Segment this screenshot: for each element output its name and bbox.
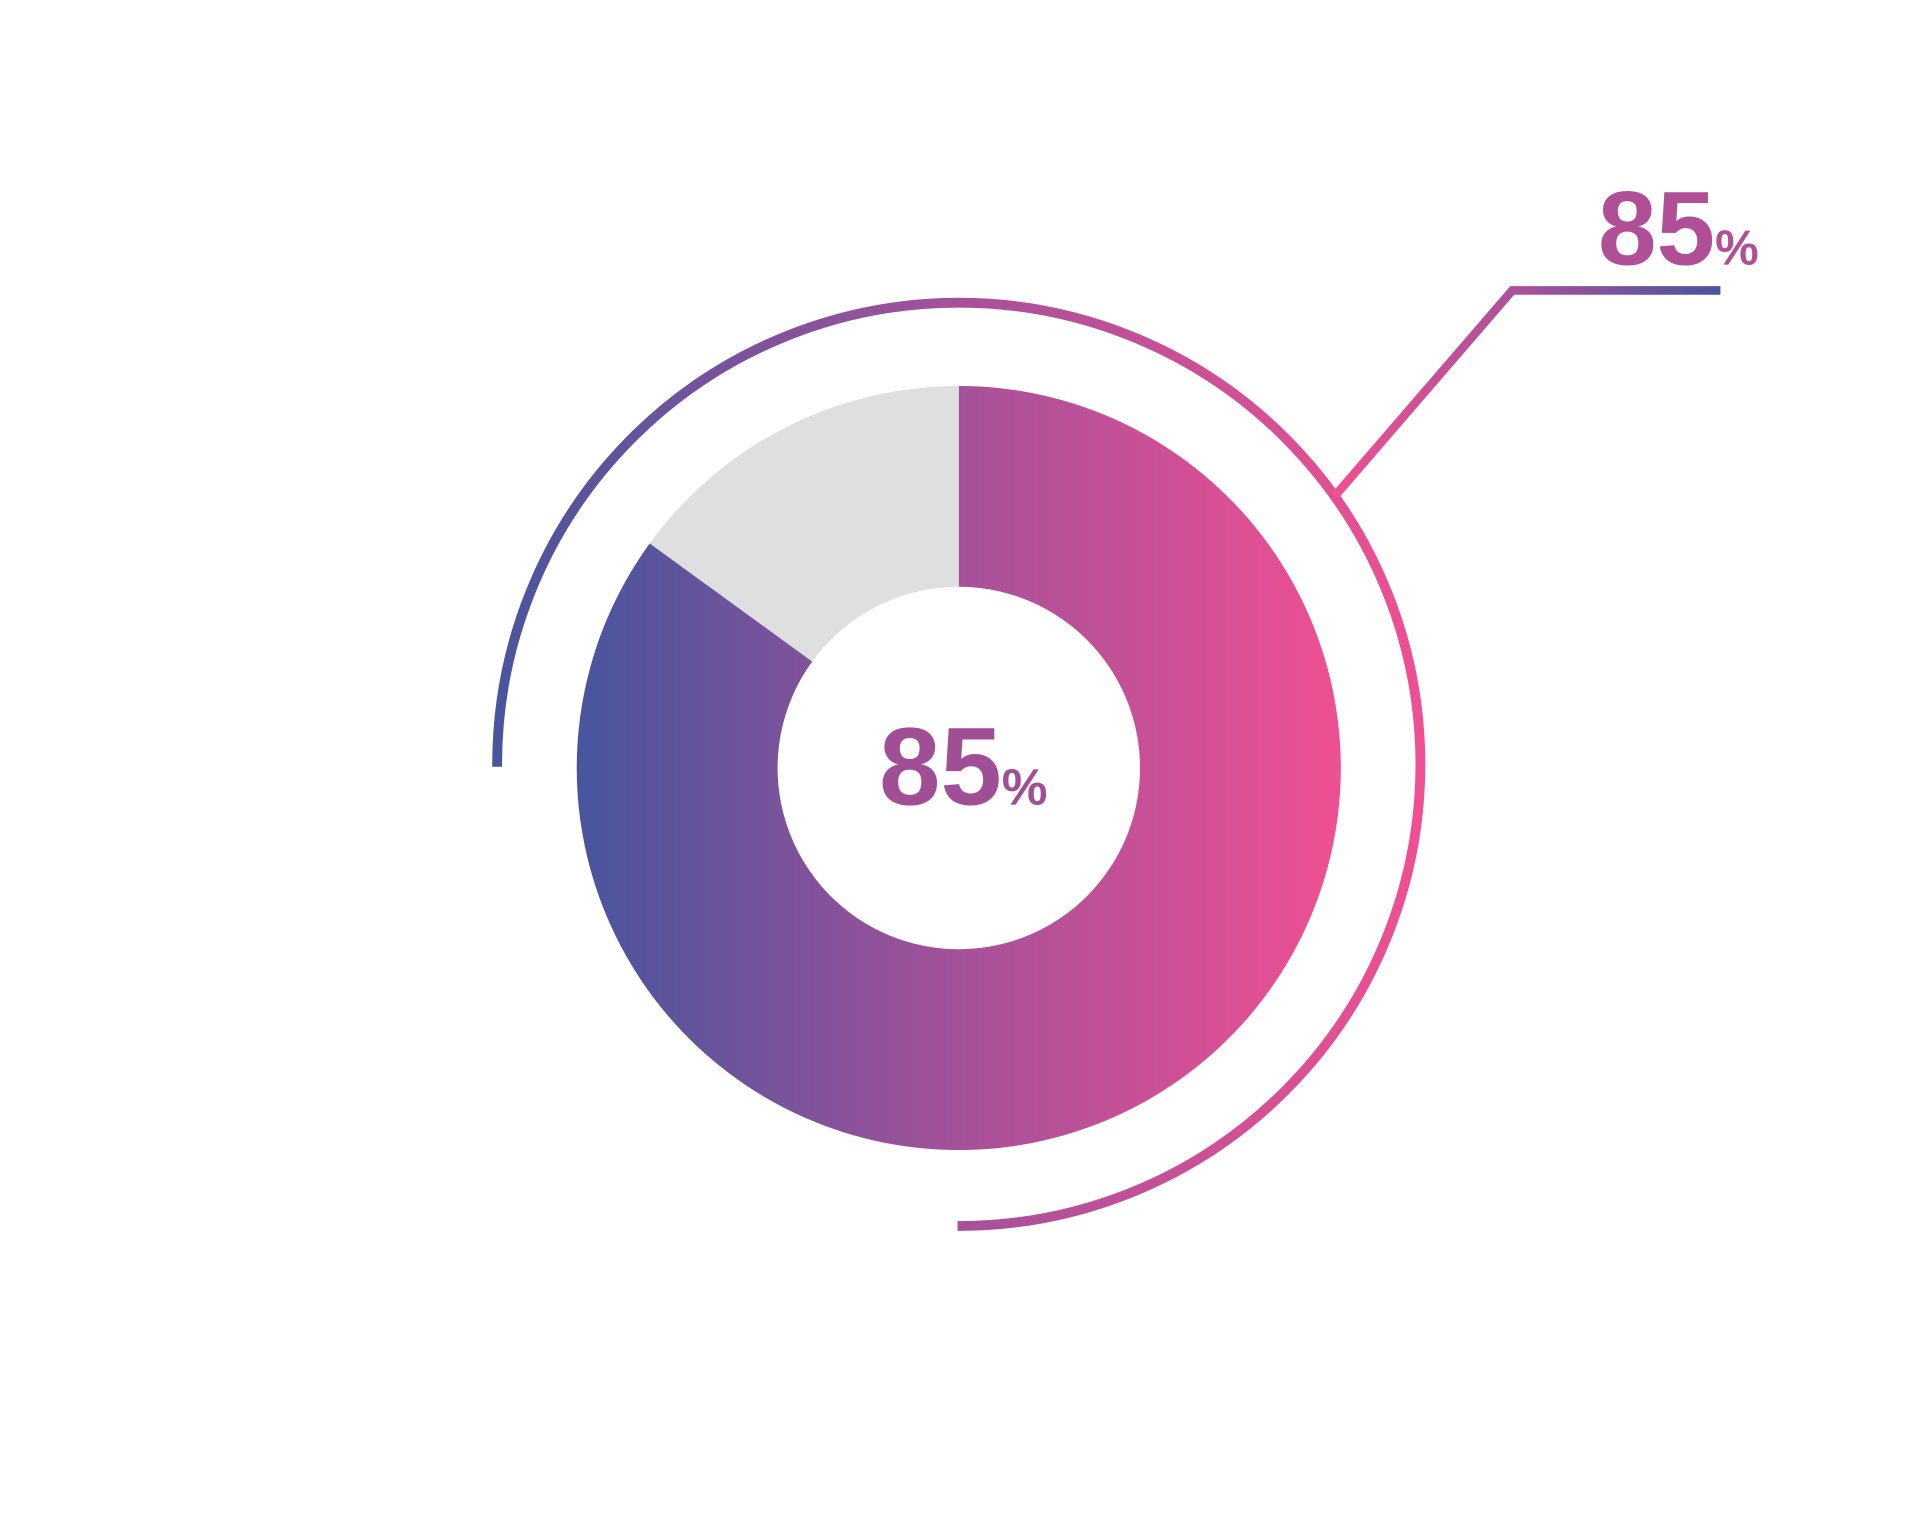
center value label: 85% xyxy=(879,706,1047,829)
callout value label: 85% xyxy=(1598,171,1759,288)
donut segment: 15% remainder xyxy=(650,386,959,661)
leader line xyxy=(1335,290,1720,496)
outer arc ring xyxy=(497,303,1420,1226)
donut segment: 85% xyxy=(577,386,1341,1150)
donut chart xyxy=(577,386,1341,1150)
